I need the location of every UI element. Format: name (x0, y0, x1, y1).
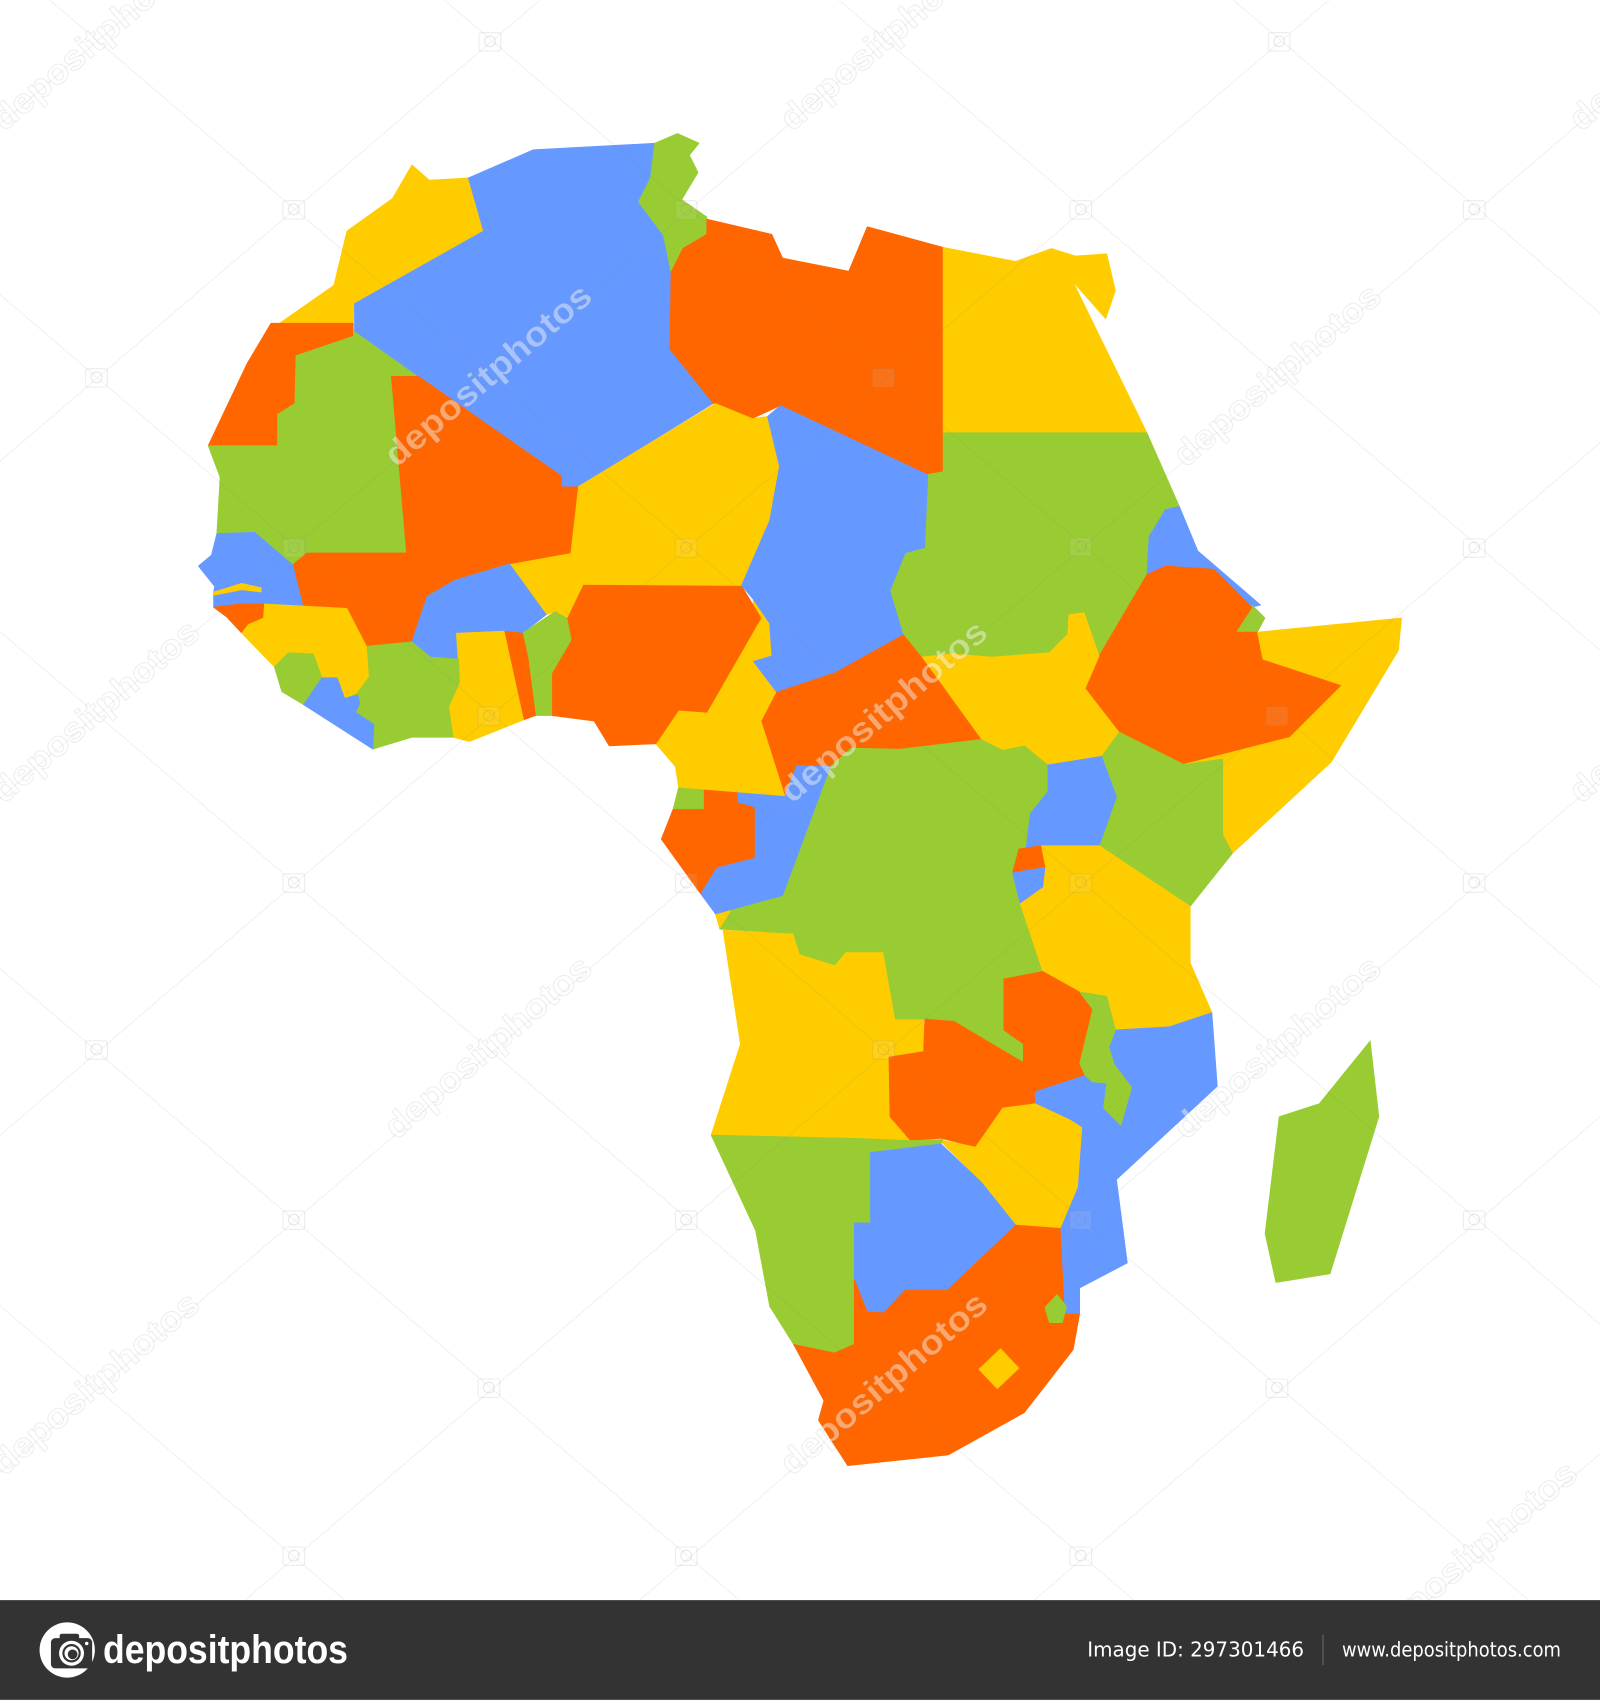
country: Cabinda (715, 909, 733, 929)
country: Gambia (214, 583, 261, 595)
footer logo wordmark: depositphotos (103, 1628, 348, 1672)
country: Angola (711, 930, 924, 1141)
country: Zambia (889, 971, 1093, 1147)
country: Burkina Faso (412, 564, 546, 659)
watermark: repeated depositphotos marks: depositphotos (773, 613, 995, 810)
country: Nigeria (552, 584, 761, 746)
country: Kenya (1099, 732, 1233, 906)
country: Somalia (1184, 618, 1402, 853)
footer image id: Image ID: 297301466 (1087, 1638, 1304, 1662)
country: Malawi (1080, 992, 1132, 1125)
country: Algeria (354, 143, 713, 487)
country: Mali (293, 376, 578, 646)
country: Gabon (661, 788, 754, 893)
country: Senegal (198, 532, 304, 608)
country: Equatorial Guinea (673, 787, 704, 809)
country: Republic of the Congo (700, 765, 830, 914)
country: Guinea-Bissau (214, 604, 264, 633)
country: Lesotho (979, 1349, 1019, 1389)
country: Mozambique (1035, 1013, 1217, 1314)
country: Western Sahara (208, 323, 353, 446)
watermark: repeated depositphotos marks: depositphotos (1362, 1454, 1585, 1652)
country: Ethiopia (1085, 566, 1342, 764)
country: Madagascar (1265, 1041, 1379, 1283)
country: Rwanda (1012, 846, 1045, 873)
country: Democratic Republic of the Congo (720, 739, 1047, 1062)
country: Tunisia (638, 133, 707, 272)
country: South Sudan (921, 613, 1119, 764)
watermark: repeated depositphotos marks: depositphotos (1166, 277, 1389, 474)
country: Cameroon (656, 600, 785, 796)
country: Liberia (304, 678, 374, 749)
country: Eritrea (1147, 506, 1261, 607)
country: Egypt (943, 247, 1147, 433)
footer bar (0, 1600, 1600, 1700)
country: Chad (741, 406, 928, 692)
country: Uganda (1025, 756, 1117, 848)
country: Ivory Coast (345, 642, 460, 749)
map: Africa countries (198, 133, 1402, 1466)
footer logo icon: camera in circle (40, 1622, 95, 1678)
watermark: repeated depositphotos marks: depositphotos (773, 1285, 995, 1483)
watermark: repeated depositphotos marks: depositphotos (377, 277, 600, 474)
country: Libya (670, 219, 943, 477)
country: Botswana (854, 1144, 1016, 1313)
country: Sierra Leone (274, 653, 322, 705)
watermark: repeated depositphotos marks: depositphotos (377, 949, 600, 1147)
country: Togo (504, 631, 536, 720)
country: Central African Republic (761, 634, 981, 796)
country: South Africa (793, 1225, 1080, 1466)
country: Sudan (890, 433, 1179, 657)
country: Benin (522, 612, 571, 716)
country: Ghana (449, 631, 524, 742)
country: Zimbabwe (939, 1104, 1082, 1228)
country: Morocco (280, 165, 483, 323)
watermark: camera marks (86, 33, 1485, 1565)
country: Burundi (1012, 867, 1045, 903)
country: Mauritania (208, 330, 418, 565)
country: Eswatini (1045, 1294, 1067, 1323)
country: Guinea (242, 604, 369, 698)
country: Niger (509, 403, 779, 618)
country: Namibia (711, 1135, 943, 1353)
watermark: repeated depositphotos marks: depositphotos (1166, 949, 1389, 1147)
country: Djibouti (1236, 605, 1265, 632)
footer website url: www.depositphotos.com (1342, 1638, 1561, 1662)
country: Tanzania (1020, 846, 1212, 1030)
